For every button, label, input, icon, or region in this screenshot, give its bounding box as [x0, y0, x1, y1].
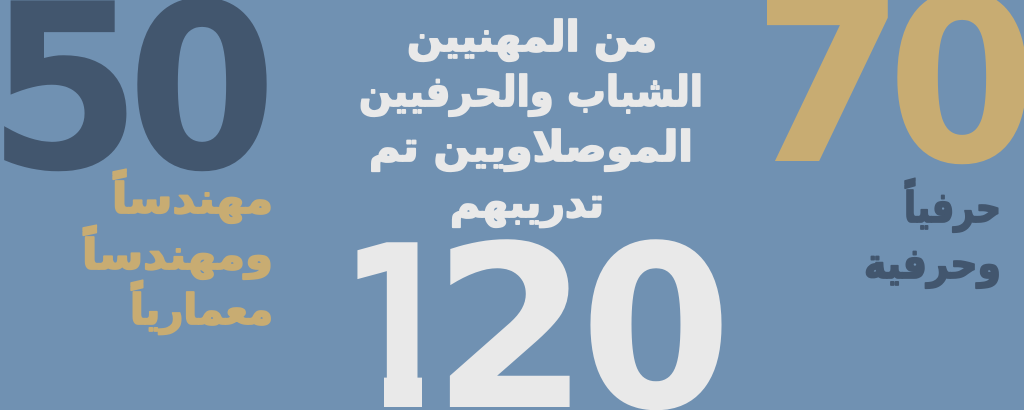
heading: trained young professionals: تدريبهم [450, 178, 604, 228]
label: craftspeople [864, 178, 1001, 289]
panel: trainees statistic [330, 12, 732, 410]
label: craftspeople: حرفياً [904, 178, 1001, 233]
heading: trained young professionals: الموصلاويين تم [369, 122, 693, 172]
panel: engineers statistic [0, 0, 277, 334]
heading: trained young professionals [359, 12, 703, 228]
heading: trained young professionals: الشباب والحرفيين [359, 67, 703, 117]
number: 50 [0, 0, 277, 223]
label: engineers: مهندساً [112, 169, 273, 224]
label: engineers: معمارياً [130, 280, 273, 334]
label: craftspeople: وحرفية [864, 239, 1001, 289]
label: engineers [82, 169, 273, 334]
label: engineers: ومهندساً [82, 225, 273, 280]
number: 120 [330, 198, 732, 410]
heading: trained young professionals: من المهنيين [407, 12, 657, 62]
panel: craftspeople statistic [730, 0, 1024, 289]
number: 70 [730, 0, 1024, 216]
